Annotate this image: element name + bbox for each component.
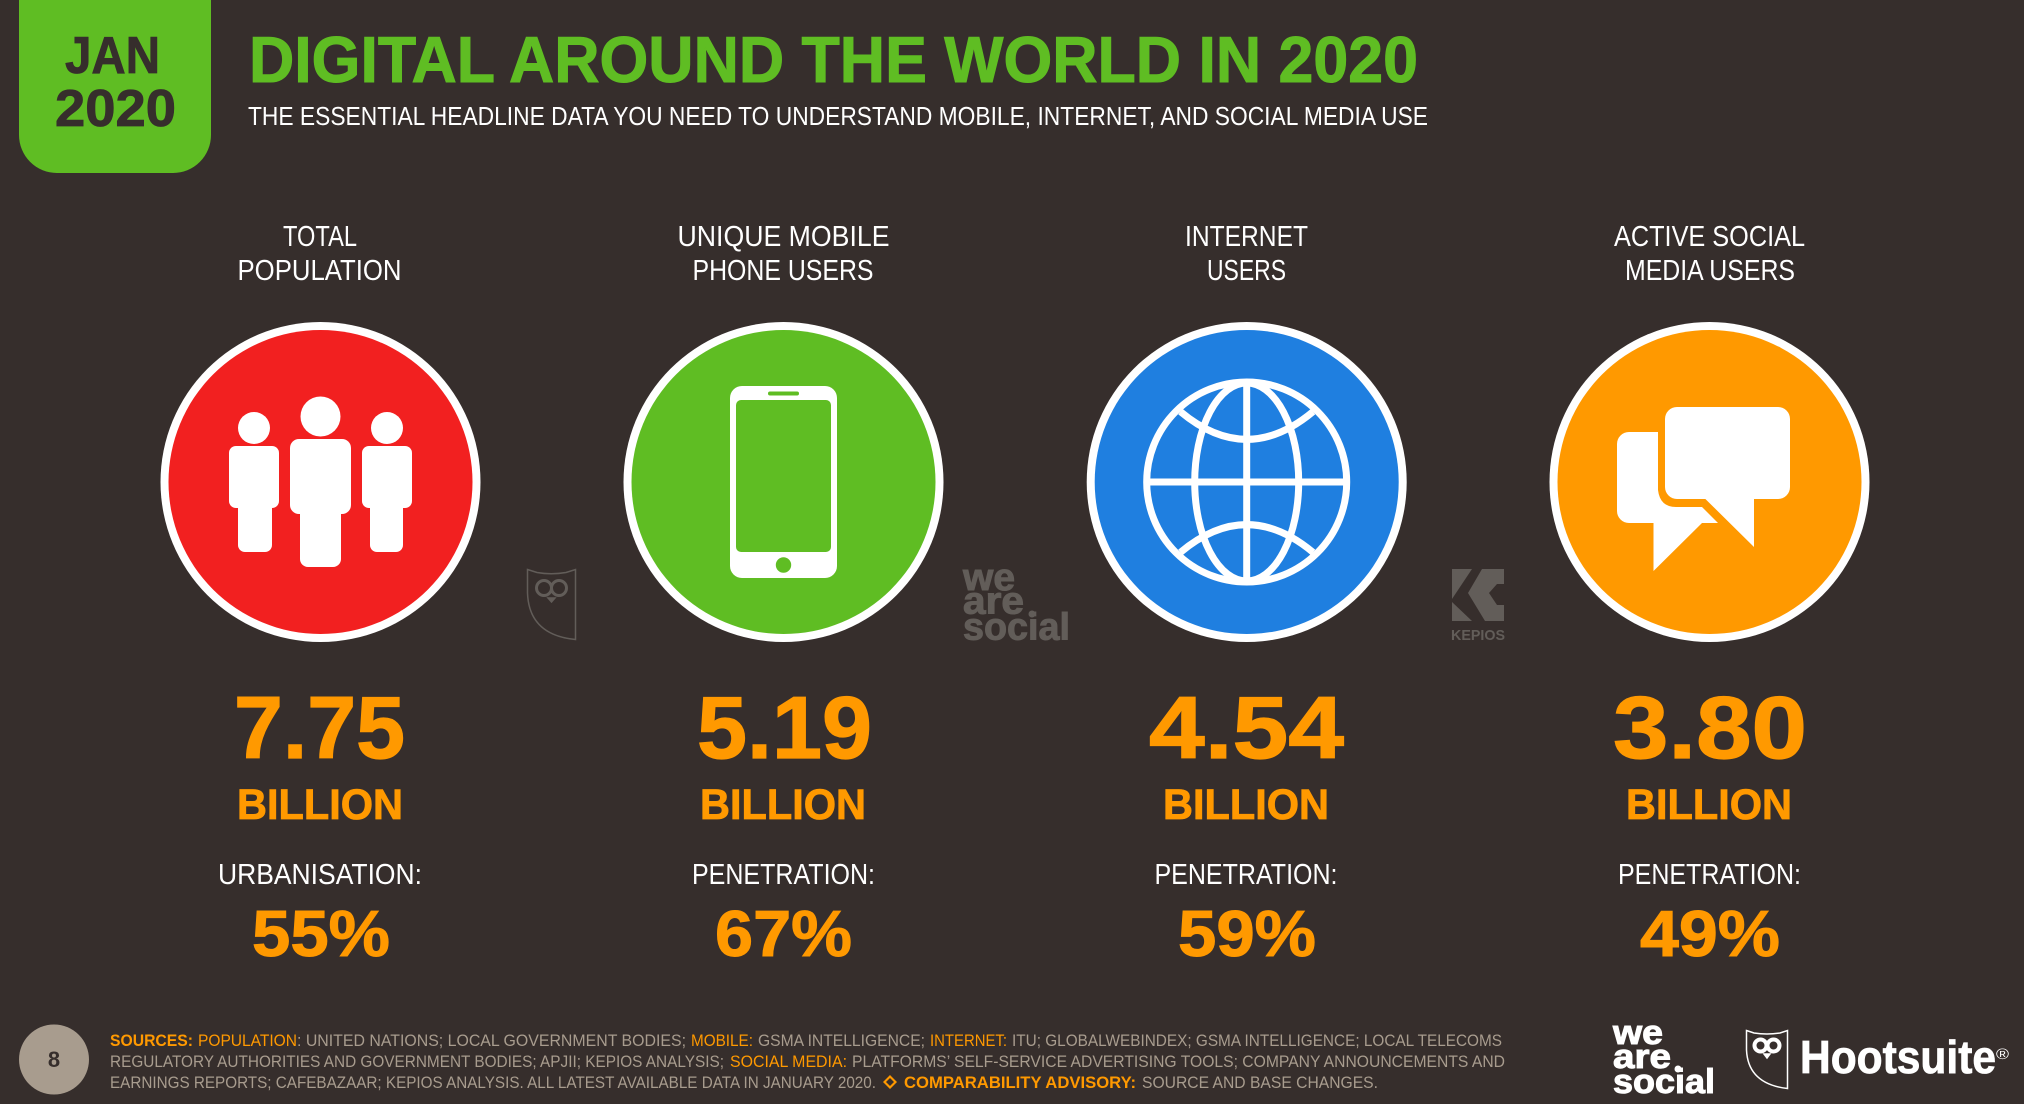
logo: we are social xyxy=(1612,1014,1715,1101)
panel: active social media users xyxy=(1550,221,1870,970)
logo: faint we are social: are xyxy=(963,580,1024,622)
sources text block xyxy=(110,1031,1505,1092)
value: 3.80: 3.80 xyxy=(1613,678,1807,777)
label: penetration: PENETRATION: xyxy=(1154,859,1338,891)
heading: total population: TOTAL xyxy=(283,221,357,253)
heading: internet users: USERS xyxy=(1207,255,1286,287)
unit: billion: BILLION xyxy=(237,781,403,829)
value: 55%: 55% xyxy=(252,897,390,970)
icon: phone in green circle xyxy=(624,322,944,642)
logo: faint we are social: we xyxy=(962,557,1015,599)
heading: unique mobile phone users xyxy=(678,221,890,287)
sources text block: : UNITED NATIONS; LOCAL GOVERNMENT BODIES; xyxy=(297,1031,686,1050)
heading: active social media users xyxy=(1614,221,1805,287)
unit: billion: BILLION xyxy=(1626,781,1792,829)
heading: internet users xyxy=(1185,221,1308,287)
value: 67%: 67% xyxy=(715,897,852,970)
sources text block: POPULATION xyxy=(198,1031,297,1050)
value: 7.75: 7.75 xyxy=(234,678,405,777)
sources text block: ITU; GLOBALWEBINDEX; GSMA INTELLIGENCE; LOCAL TELECOMS xyxy=(1012,1031,1502,1050)
page number badge xyxy=(19,1024,89,1094)
logo: faint we are social: social xyxy=(963,606,1070,648)
unit: billion: BILLION xyxy=(1163,781,1329,829)
value: 49%: 49% xyxy=(1640,897,1780,970)
icon: speech bubbles in orange circle xyxy=(1550,322,1870,642)
logo: we are social: we xyxy=(1612,1014,1663,1052)
sources text block: PLATFORMS’ SELF-SERVICE ADVERTISING TOOLS; COMPANY ANNOUNCEMENTS AND xyxy=(852,1052,1505,1071)
heading: active social media users: MEDIA USERS xyxy=(1625,255,1795,287)
heading: unique mobile phone users: UNIQUE MOBILE xyxy=(678,221,890,253)
heading: internet users: INTERNET xyxy=(1185,221,1308,253)
sources text block: MOBILE: xyxy=(691,1031,753,1050)
value: 4.54: 4.54 xyxy=(1149,678,1344,777)
panel: internet users xyxy=(1087,221,1407,970)
sources text block: GSMA INTELLIGENCE; xyxy=(758,1031,925,1050)
label: penetration: PENETRATION: xyxy=(692,859,875,891)
icon: people in red circle xyxy=(160,322,480,642)
date tab xyxy=(19,0,211,173)
heading: unique mobile phone users: PHONE USERS xyxy=(692,255,874,287)
subtitle: THE ESSENTIAL HEADLINE DATA YOU NEED TO UNDERSTAND MOBILE, INTERNET, AND SOCIAL MEDIA USE xyxy=(248,101,1428,131)
label: urbanisation: URBANISATION: xyxy=(218,859,422,891)
logo: hootsuite wordmark: Hootsuite xyxy=(1800,1031,1996,1083)
value: 5.19: 5.19 xyxy=(697,678,872,777)
sources text block: SOURCE AND BASE CHANGES. xyxy=(1142,1073,1378,1092)
icon: globe in blue circle xyxy=(1087,322,1407,642)
title: DIGITAL AROUND THE WORLD IN 2020 xyxy=(249,23,1418,96)
date tab: JAN xyxy=(65,27,160,85)
sources text block: INTERNET: xyxy=(930,1031,1007,1050)
heading: total population xyxy=(238,221,402,287)
logo: faint we are social xyxy=(962,557,1070,648)
heading: active social media users: ACTIVE SOCIAL xyxy=(1614,221,1805,253)
sources text block: SOURCES: xyxy=(110,1031,193,1050)
logo: hootsuite owl xyxy=(1746,1030,1788,1088)
panel: unique mobile phone users xyxy=(624,221,944,970)
sources text block: EARNINGS REPORTS; CAFEBAZAAR; KEPIOS ANALYSIS. ALL LATEST AVAILABLE DATA IN JANUARY 2020. xyxy=(110,1073,876,1092)
logo: faint kepios: KEPIOS xyxy=(1451,627,1505,644)
sources text block: SOCIAL MEDIA: xyxy=(730,1052,847,1071)
heading: total population: POPULATION xyxy=(238,255,402,287)
date tab: 2020 xyxy=(55,80,176,138)
sources text block: REGULATORY AUTHORITIES AND GOVERNMENT BODIES; APJII; KEPIOS ANALYSIS; xyxy=(110,1052,724,1071)
page number badge: 8 xyxy=(48,1047,60,1072)
value: 59%: 59% xyxy=(1178,897,1316,970)
icon: faint hootsuite owl xyxy=(528,570,576,640)
logo: we are social: are xyxy=(1613,1038,1671,1076)
logo: faint kepios xyxy=(1451,569,1505,644)
unit: billion: BILLION xyxy=(700,781,866,829)
label: penetration: PENETRATION: xyxy=(1618,859,1801,891)
sources text block: COMPARABILITY ADVISORY: xyxy=(904,1073,1136,1092)
logo: hootsuite wordmark: ® xyxy=(1996,1046,2009,1063)
logo: we are social: social xyxy=(1613,1063,1715,1101)
panel: total population xyxy=(160,221,480,970)
